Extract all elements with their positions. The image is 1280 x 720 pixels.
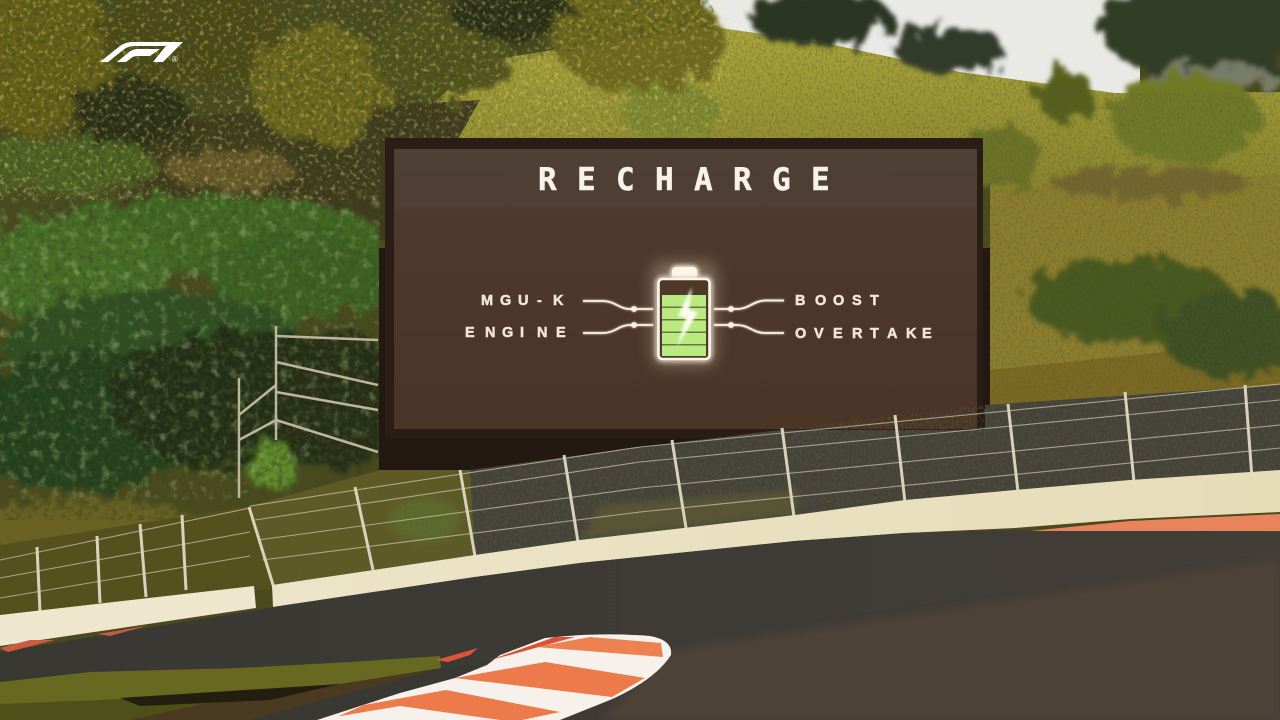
billboard <box>379 138 990 480</box>
track wall left <box>0 586 256 646</box>
label: ENGINE: ENGINE <box>465 325 566 341</box>
apex kerb <box>250 634 671 720</box>
logo: F1 <box>100 42 183 64</box>
connector lines <box>583 300 784 333</box>
near kerb stripe <box>98 626 146 636</box>
sunlit leaves top left <box>0 0 730 200</box>
scaffold <box>239 326 378 498</box>
near kerb on left wall <box>0 640 55 652</box>
grass verge <box>0 656 441 720</box>
billboard screen <box>394 149 977 429</box>
logo: F1: ® <box>172 55 178 64</box>
foliage shadow texture <box>0 0 720 520</box>
hill and right side grass texture <box>400 28 1280 404</box>
label: OVERTAKE: OVERTAKE <box>795 326 932 342</box>
fence mesh texture <box>252 386 1280 584</box>
track wall right <box>272 470 1280 607</box>
billboard frame <box>379 248 990 480</box>
label: BOOST: BOOST <box>795 293 879 309</box>
green leaves left <box>0 190 380 500</box>
far kerb: orange strip <box>1030 514 1280 531</box>
title: RECHARGE: RECHARGE <box>538 162 830 198</box>
fence backdrop <box>470 385 1280 555</box>
inner road shoulder <box>600 560 1280 720</box>
label: MGU-K: MGU-K <box>481 293 564 309</box>
fence <box>0 384 1280 612</box>
track surface <box>0 530 1280 720</box>
icon: battery <box>652 262 716 366</box>
